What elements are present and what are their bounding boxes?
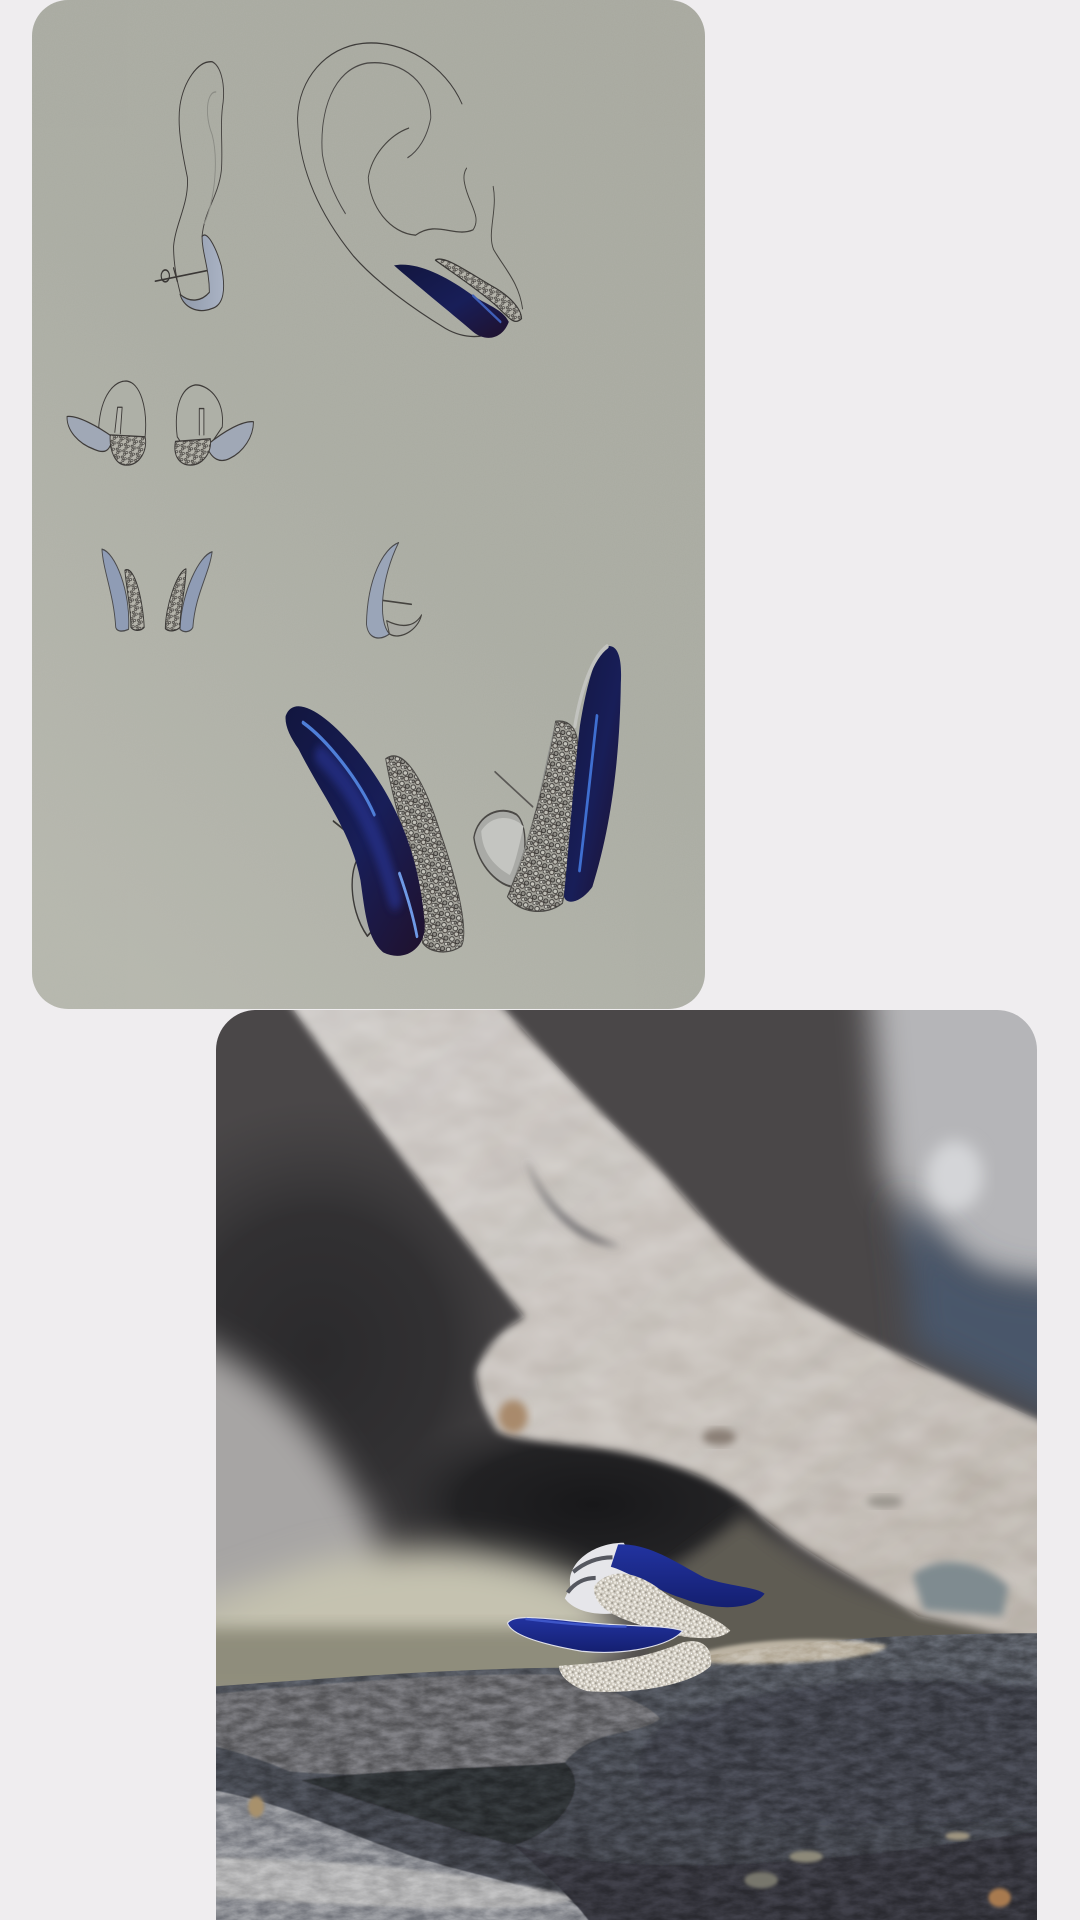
- photo: enamel and pave earring: [508, 1543, 765, 1692]
- earring lower pave band: [559, 1641, 711, 1692]
- slate rock foreground: [216, 1633, 1037, 1920]
- earring pave on ear: [435, 259, 522, 321]
- panel: product photo: [216, 1010, 1037, 1920]
- sketch paper background: [32, 0, 705, 1009]
- earring upper enamel: [611, 1544, 765, 1607]
- drawing: large ear with earring: [298, 43, 523, 338]
- earring enamel on ear: [394, 265, 509, 338]
- drawing: large earring right: [474, 646, 621, 911]
- earring upper pave band: [594, 1574, 730, 1638]
- earring lower enamel: [508, 1618, 683, 1652]
- drawing: pair side view: [102, 549, 212, 632]
- drawing: ear side view with stud: [155, 62, 224, 311]
- drawing: pair front view: [67, 381, 253, 465]
- drawing: single hook profile: [366, 543, 422, 638]
- blurred background shapes: [216, 1010, 1037, 1765]
- earring silver loop: [565, 1543, 630, 1614]
- sketch drawings: [67, 43, 621, 956]
- blurred driftwood branch: [287, 1010, 1037, 1634]
- photo background: [216, 1010, 1037, 1686]
- drawing: large earring left: [286, 706, 464, 956]
- panel: design sketch on grey paper: [32, 0, 705, 1009]
